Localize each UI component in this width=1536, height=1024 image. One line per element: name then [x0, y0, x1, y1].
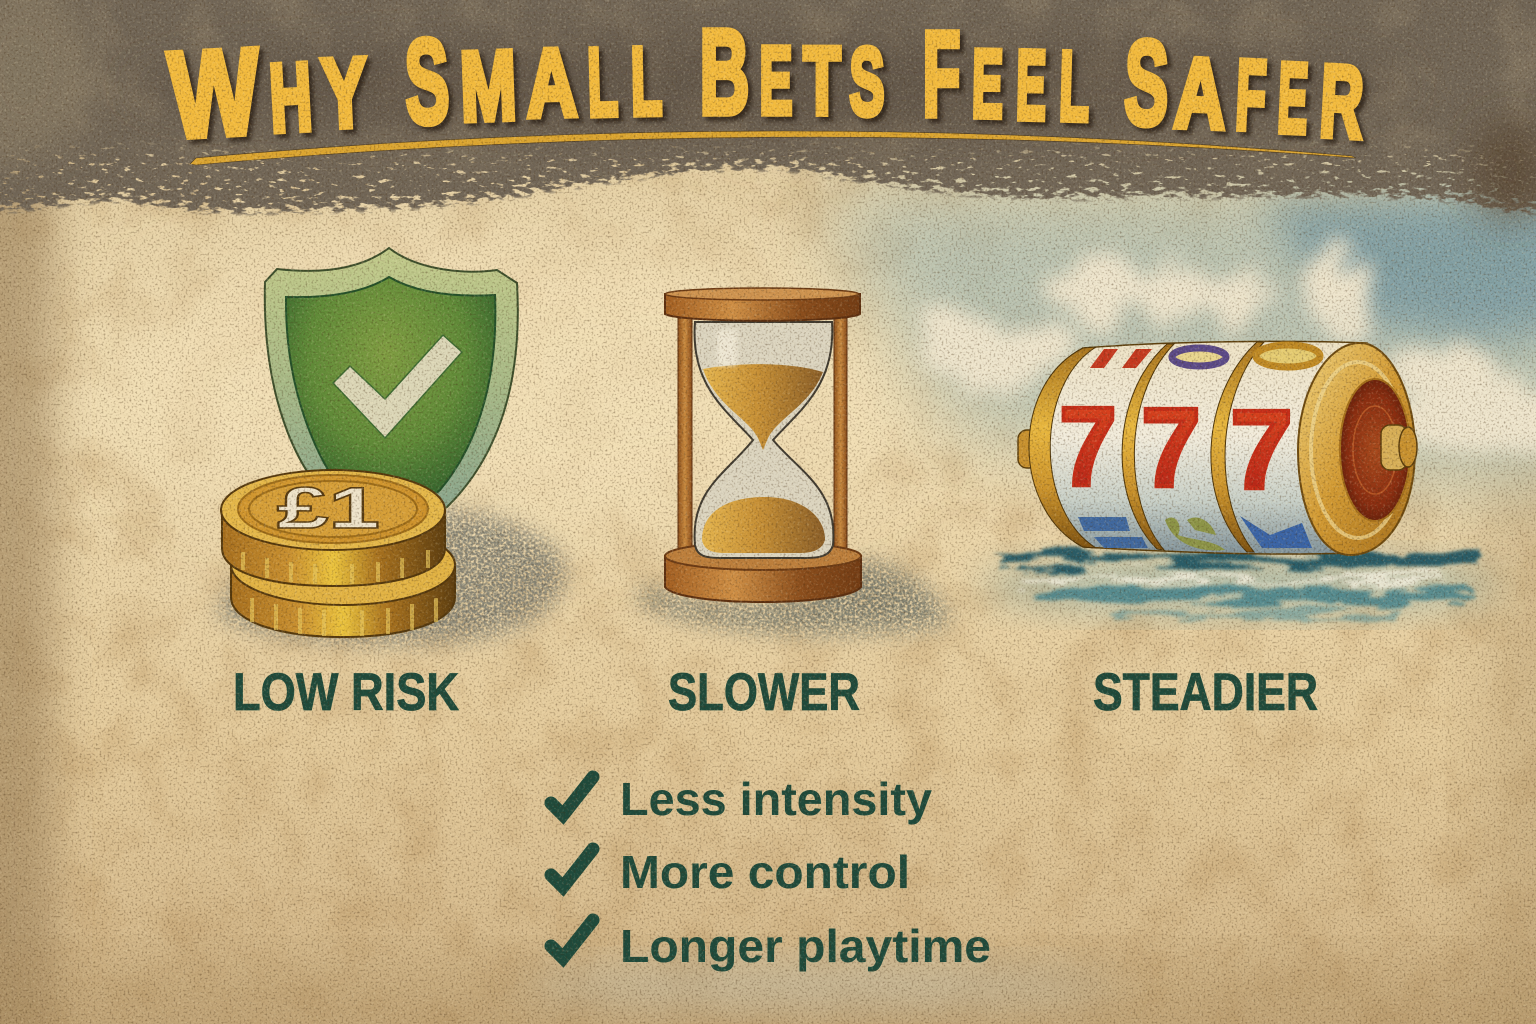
- water under the reel: [980, 552, 1500, 618]
- top sand: [703, 364, 823, 450]
- title: M: [458, 30, 518, 141]
- title: L: [1058, 31, 1091, 141]
- lower reel symbols: [1078, 516, 1312, 550]
- title: F: [1234, 39, 1268, 151]
- upper reel symbols: [1090, 345, 1320, 368]
- check item: less intensity: Less intensity: [620, 773, 932, 825]
- title: H: [267, 43, 315, 152]
- posts: [678, 318, 692, 558]
- sevens: 7: [1230, 387, 1293, 512]
- label: steadier: STEADIER: [1093, 663, 1318, 722]
- coin value: £1: [277, 476, 380, 541]
- right axle: [1381, 425, 1417, 470]
- icon: shield with check mark: [265, 248, 518, 545]
- title underline: [190, 131, 1356, 165]
- title: S: [403, 14, 451, 149]
- icon: slot reel with 777: [1018, 341, 1417, 555]
- ground shadows: [215, 510, 950, 644]
- benefits checklist: [551, 773, 991, 972]
- icon: stacked £1 coins: [221, 470, 455, 637]
- upper coin: [221, 470, 445, 586]
- label: slower: SLOWER: [668, 663, 860, 722]
- title: W: [166, 23, 263, 163]
- title: E: [971, 31, 1004, 138]
- sevens: 7: [1059, 384, 1117, 509]
- title: E: [1276, 42, 1310, 154]
- check item: more control: More control: [620, 846, 910, 898]
- sevens: 7: [1141, 385, 1201, 510]
- sky and clouds on the right: [820, 180, 1536, 478]
- title: T: [804, 28, 840, 134]
- title: E: [1015, 30, 1047, 140]
- title: E: [760, 28, 792, 134]
- title: F: [922, 6, 960, 142]
- left axle: [1018, 430, 1038, 468]
- glass highlight: [717, 330, 737, 366]
- title: L: [630, 28, 663, 135]
- icon: hourglass: [665, 288, 861, 602]
- gold bands: [1029, 342, 1264, 552]
- title: A: [525, 29, 578, 137]
- title: S: [1123, 16, 1170, 151]
- lower coin: [231, 525, 455, 637]
- dark top band: [0, 0, 1536, 220]
- label: low risk: LOW RISK: [233, 663, 459, 722]
- top cap: [665, 294, 860, 321]
- sevens: [1059, 384, 1293, 512]
- title: L: [586, 29, 619, 136]
- base: [665, 556, 861, 602]
- icon: check mark: [333, 335, 462, 438]
- end cap: [1298, 343, 1415, 555]
- title: B: [700, 4, 750, 140]
- drum: [1032, 341, 1367, 554]
- title: A: [1173, 37, 1228, 149]
- title: S: [850, 28, 884, 136]
- glass: [695, 322, 833, 558]
- title: [166, 4, 1366, 163]
- check item: longer playtime: Longer playtime: [620, 920, 991, 972]
- title: Y: [320, 37, 369, 148]
- title: R: [1317, 44, 1366, 160]
- bottom sand: [702, 497, 825, 553]
